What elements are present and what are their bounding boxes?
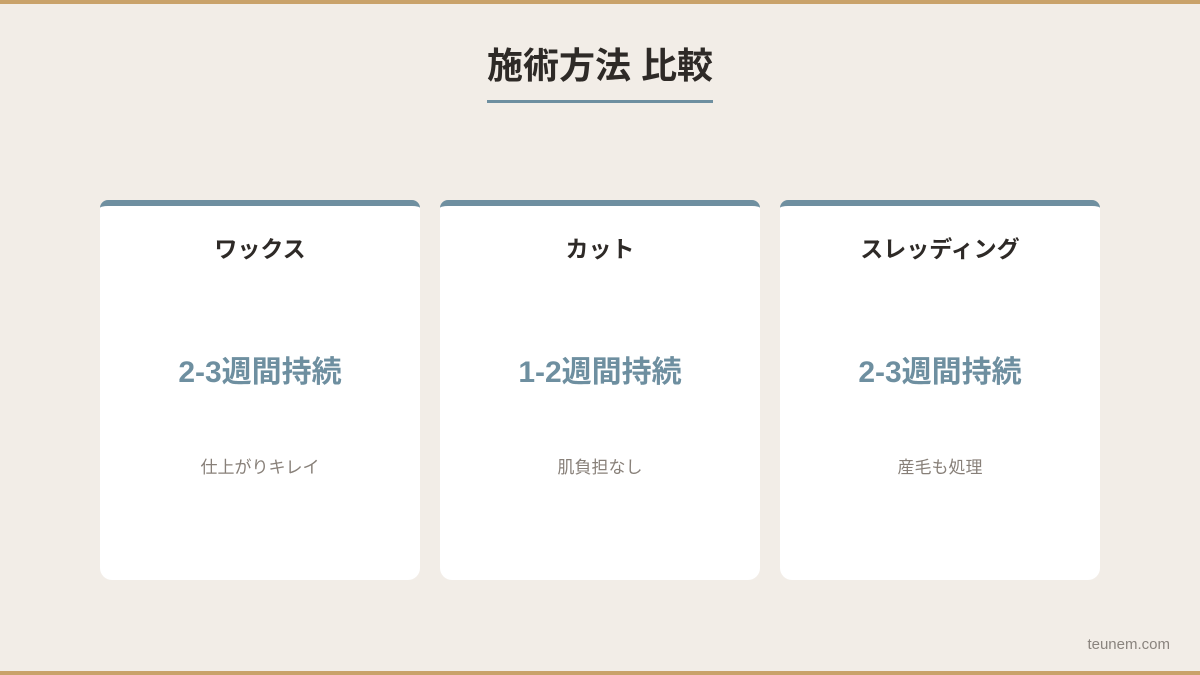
duration: cut: 1-2週間持続 (518, 356, 682, 389)
panel: wax (100, 200, 420, 580)
duration: wax: 2-3週間持続 (178, 356, 342, 389)
heading: threading: スレッディング (860, 236, 1020, 262)
note: threading: 産毛も処理 (898, 458, 982, 477)
panel: threading (780, 200, 1100, 580)
title: 施術方法 比較 (487, 45, 713, 86)
heading: wax: ワックス (214, 236, 306, 262)
note: cut: 肌負担なし (558, 458, 642, 477)
panel: cut (440, 200, 760, 580)
note: wax: 仕上がりキレイ (200, 458, 320, 477)
footer credit: teunem.com (1087, 636, 1170, 653)
heading: cut: カット (566, 236, 634, 262)
duration: threading: 2-3週間持続 (858, 356, 1022, 389)
